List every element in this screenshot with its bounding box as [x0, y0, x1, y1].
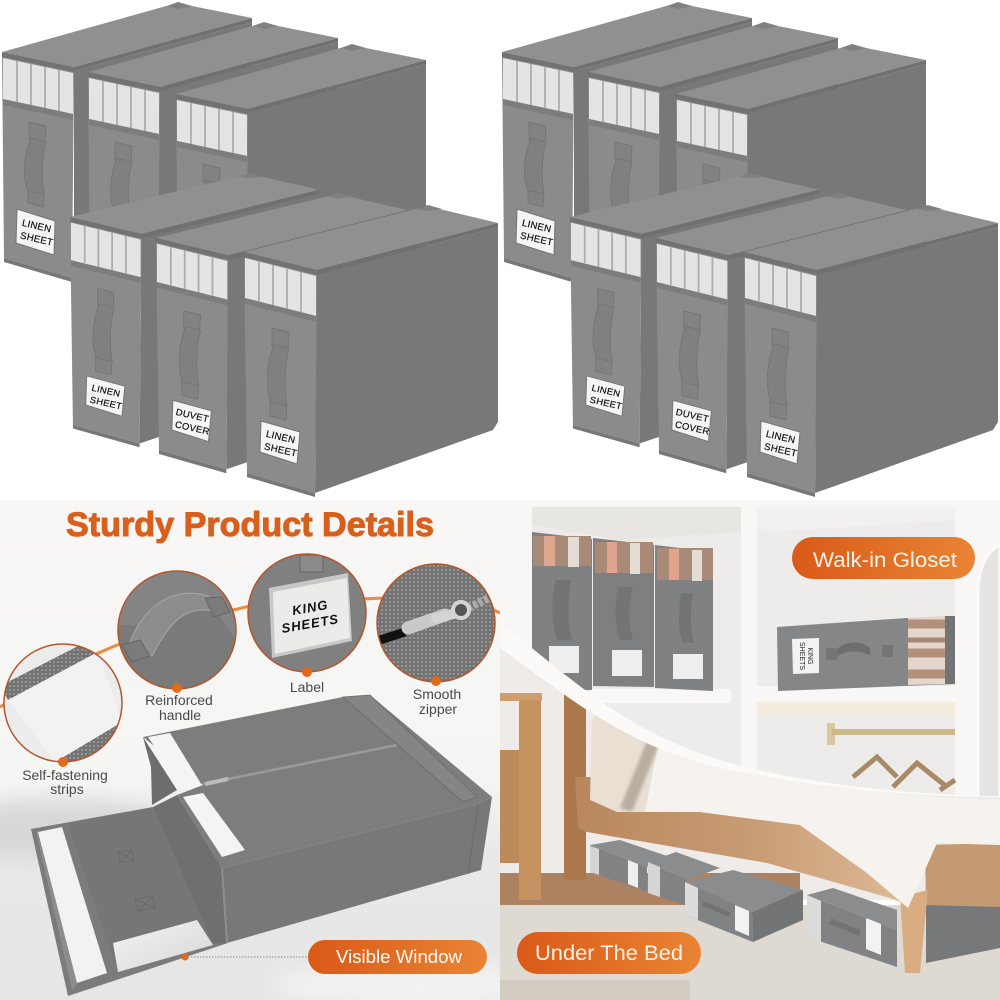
box: front middle	[156, 193, 407, 473]
pill: visible window	[308, 940, 487, 974]
caption: reinforced handle: Reinforced	[145, 692, 213, 708]
closet wall	[532, 520, 955, 795]
under-bed box 3	[685, 870, 803, 942]
visible window	[113, 920, 213, 972]
divider curve	[532, 648, 998, 797]
under-bed box 4	[807, 888, 897, 967]
box: front middle: DUVET	[175, 407, 210, 424]
shelves	[590, 686, 955, 716]
nightstand	[500, 693, 542, 900]
box: back right	[676, 44, 926, 324]
top shelves	[532, 507, 741, 540]
detail circle: handle	[118, 570, 236, 693]
box: back left with label: LINEN	[21, 218, 52, 235]
box: front right: SHEET	[263, 441, 298, 460]
connector line	[0, 598, 500, 707]
lying box on shelf: SHEETS	[798, 642, 805, 670]
stitch squares	[118, 850, 155, 911]
detail circle: label: KING	[291, 597, 329, 618]
box: front right	[744, 205, 998, 497]
closet scene	[500, 500, 1000, 820]
lid zipper	[203, 745, 397, 784]
bed scene	[500, 640, 1000, 1000]
detail circle: label: SHEETS	[280, 611, 340, 636]
lid right band	[343, 695, 477, 802]
box: front right: LINEN	[265, 429, 296, 446]
rug	[500, 905, 1000, 1000]
box: front left	[70, 173, 319, 447]
far bed rail	[925, 843, 1000, 907]
box: back left with label	[502, 2, 752, 282]
pill: walk-in closet: Walk-in Gloset	[813, 549, 957, 572]
box: back left with label: SHEET	[519, 230, 554, 249]
under-bed box 1	[590, 840, 670, 892]
pill: visible window: Visible Window	[336, 947, 463, 967]
lying box on shelf	[777, 616, 955, 691]
pill: walk-in closet	[792, 537, 975, 579]
wall	[500, 640, 1000, 900]
box: front left: SHEET	[589, 395, 623, 411]
upright box 3	[655, 545, 713, 691]
product set: left six boxes	[2, 2, 498, 497]
caption: self-fastening strips: Self-fastening	[22, 767, 108, 783]
visible window dotted leader	[185, 956, 307, 958]
inner wall	[153, 795, 227, 944]
visible window dot	[182, 954, 188, 960]
detail circle: strips	[0, 644, 128, 770]
upright box 1	[532, 532, 592, 690]
caption: smooth zipper: Smooth	[413, 686, 461, 702]
bed leg	[900, 890, 928, 973]
closet frame	[500, 500, 1000, 820]
box: front middle: COVER	[174, 419, 211, 437]
under-bed box 2	[648, 852, 720, 905]
flap white strip	[38, 827, 107, 983]
product set: right six boxes	[502, 2, 998, 497]
flap floor	[31, 807, 228, 996]
panel: usage scenes	[500, 500, 1000, 1000]
box: front left: SHEET	[89, 395, 123, 411]
lying box on shelf: KING	[806, 647, 813, 665]
box: front middle	[656, 193, 907, 473]
box: back right	[176, 44, 426, 324]
panel: sturdy product details	[0, 500, 500, 1000]
box: front left: LINEN	[91, 383, 121, 399]
box: front left: LINEN	[591, 383, 621, 399]
arch mirror	[980, 548, 998, 796]
box: front right	[244, 205, 498, 497]
pillow	[590, 710, 660, 812]
far dark box	[926, 905, 1000, 963]
box: back left with label	[2, 2, 252, 282]
title: Sturdy Product Details	[66, 506, 434, 544]
duvet fold	[620, 738, 660, 812]
box: front middle: COVER	[674, 419, 711, 437]
box: back middle	[88, 22, 338, 302]
box: back middle	[588, 22, 838, 302]
box: front middle: DUVET	[675, 407, 710, 424]
box: back left with label: LINEN	[521, 218, 552, 235]
duvet	[645, 735, 1000, 908]
upright box 2	[593, 538, 654, 687]
open storage box	[31, 695, 492, 996]
floor	[500, 873, 800, 905]
detail circle: zipper	[377, 564, 495, 686]
pill: under the bed: Under The Bed	[535, 942, 683, 965]
headboard post	[564, 690, 586, 880]
lid white strips	[148, 733, 200, 787]
bed rail	[575, 777, 908, 905]
lid top	[143, 695, 492, 868]
box: front right: SHEET	[763, 441, 798, 460]
hangers	[853, 757, 955, 790]
caption: label: Label	[290, 679, 324, 695]
box side	[222, 797, 492, 943]
pill: under the bed	[517, 932, 701, 974]
box: front right: LINEN	[765, 429, 796, 446]
box: back left with label: SHEET	[19, 230, 54, 249]
detail circle: label	[248, 554, 366, 677]
hanging rod	[827, 723, 955, 745]
caption: smooth zipper: zipper	[419, 701, 457, 717]
panel background	[0, 500, 570, 1000]
caption: self-fastening strips: strips	[50, 781, 84, 797]
box: front left	[570, 173, 819, 447]
caption: reinforced handle: handle	[159, 707, 201, 723]
